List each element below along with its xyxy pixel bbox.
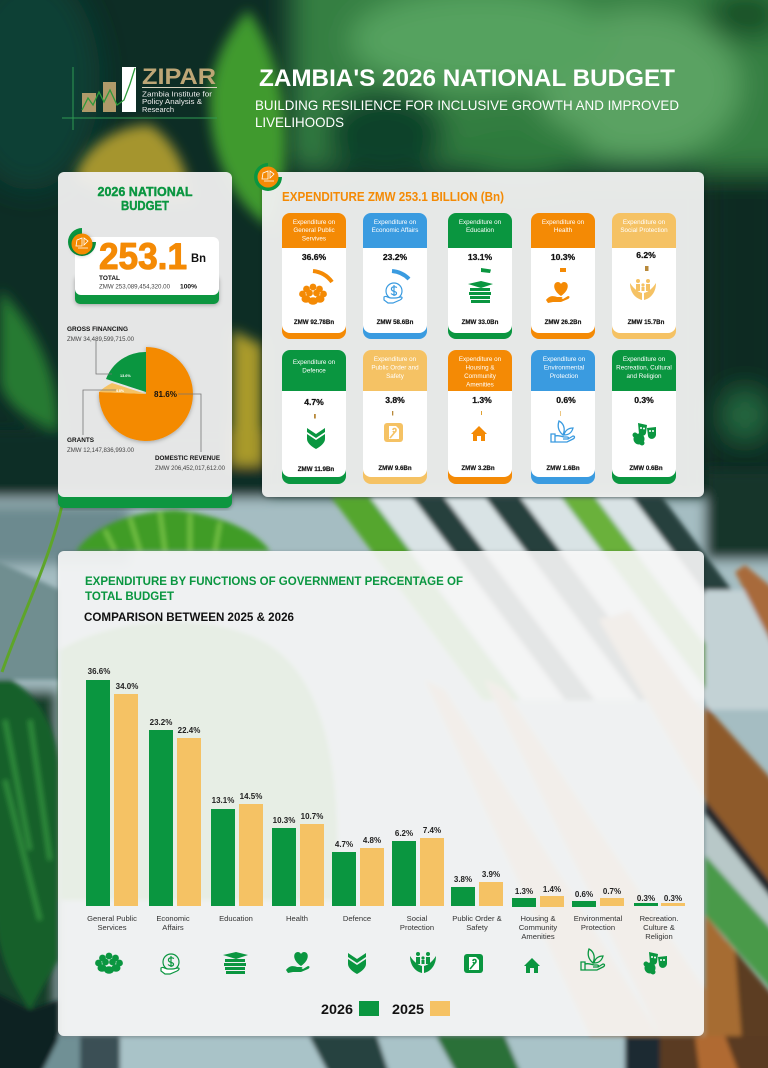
card: general public services: Expenditure on xyxy=(293,219,336,226)
card: social protection: Social Protection xyxy=(620,227,668,234)
total card xyxy=(75,236,219,304)
right edge xyxy=(705,590,768,710)
label: grants xyxy=(67,437,135,454)
pie chart: financing: 4.8% xyxy=(116,389,125,393)
legend: 2025 xyxy=(392,1002,425,1017)
bar chart: 2026 vs 2025 xyxy=(86,667,685,907)
green textured leaf xyxy=(76,510,270,551)
card: recreation, cultural and religion: 0.3% xyxy=(634,395,654,405)
category labels: Public Order & xyxy=(452,914,502,923)
bar chart: 2026 vs 2025: 1.3% xyxy=(515,887,533,896)
subheading: comparison: COMPARISON BETWEEN 2025 & 2026 xyxy=(84,612,294,624)
card: housing and community amenities: Amenities xyxy=(466,382,494,388)
card: education: 13.1% xyxy=(468,252,493,262)
total card: ZMW 253,089,454,320.00 xyxy=(99,284,171,290)
card: defence: ZMW 11.9Bn xyxy=(298,466,334,473)
subtitle: LIVELIHOODS xyxy=(255,114,344,130)
bar chart: 2026 vs 2025: 34.0% xyxy=(116,682,138,691)
card: general public services: Servives xyxy=(302,236,326,242)
total card: TOTAL xyxy=(99,275,120,282)
logo: ZIPAR: ZIPAR xyxy=(142,64,216,89)
card: social protection: ZMW 15.7Bn xyxy=(628,319,665,326)
bar chart: 2026 vs 2025: 10.7% xyxy=(301,812,323,821)
bar chart: 2026 vs 2025: 0.3% xyxy=(664,894,682,903)
bar chart: 2026 vs 2025: 36.6% xyxy=(88,667,110,676)
card: social protection: Expenditure on xyxy=(623,219,666,226)
card: environmental protection: Protection xyxy=(550,373,579,380)
subtitle: BUILDING RESILIENCE FOR INCLUSIVE GROWTH AND IMPROVED xyxy=(255,97,679,113)
card: general public services: 36.6% xyxy=(302,252,327,262)
category labels: Education xyxy=(219,914,253,923)
card: economic affairs: Economic Affairs xyxy=(372,227,418,234)
heading: expenditure: EXPENDITURE ZMW 253.1 BILLION (Bn) xyxy=(282,190,504,204)
bar chart: 2026 vs 2025: 0.3% xyxy=(637,894,655,903)
card: defence: 4.7% xyxy=(304,397,324,407)
card: environmental protection: 0.6% xyxy=(556,395,576,405)
total card: 100% xyxy=(180,284,197,290)
card: recreation, cultural and religion xyxy=(612,350,676,484)
card: housing and community amenities: ZMW 3.2Bn xyxy=(461,465,495,472)
bar chart: 2026 vs 2025: 1.4% xyxy=(543,885,561,894)
card: general public services: ZMW 92.78Bn xyxy=(294,319,334,326)
card: housing and community amenities: Community xyxy=(464,373,497,380)
label: gross financing xyxy=(67,326,135,343)
category labels: Community xyxy=(519,923,557,932)
pie chart: financing: 13.6% xyxy=(120,374,131,378)
card: public order and safety: Public Order and xyxy=(371,364,419,372)
card: recreation, cultural and religion: ZMW 0.6Bn xyxy=(629,465,663,472)
category labels: Protection xyxy=(581,923,615,932)
bar chart: 2026 vs 2025: 4.7% xyxy=(335,840,353,849)
legend: 2026 xyxy=(321,1002,354,1017)
label: domestic revenue: ZMW 206,452,017,612.00 xyxy=(155,465,226,472)
bar chart: 2026 vs 2025: 14.5% xyxy=(240,792,262,801)
logo: ZIPAR: Zambia Institute for xyxy=(142,92,213,98)
category labels: Religion xyxy=(645,932,673,941)
card: public order and safety: Expenditure on xyxy=(374,356,417,363)
category labels: Amenities xyxy=(521,932,555,941)
bar chart: 2026 vs 2025: 10.3% xyxy=(273,816,295,825)
card: environmental protection: Environmental xyxy=(544,364,584,372)
pie chart: financing xyxy=(83,340,201,452)
panel: 2026 national budget xyxy=(58,172,232,508)
label: grants: ZMW 12,147,836,993.00 xyxy=(67,447,135,454)
card: general public services: General Public xyxy=(293,227,335,234)
card: environmental protection xyxy=(531,350,595,484)
card: economic affairs xyxy=(363,213,427,339)
bar chart: 2026 vs 2025: 23.2% xyxy=(150,718,172,727)
label: domestic revenue: DOMESTIC REVENUE xyxy=(155,455,221,462)
card: education: ZMW 33.0Bn xyxy=(462,319,499,326)
card: education xyxy=(448,213,512,339)
label: domestic revenue xyxy=(155,455,226,472)
category labels: Recreation. xyxy=(640,914,678,923)
bar chart: 2026 vs 2025: 3.9% xyxy=(482,870,500,879)
heading: expenditure by functions: EXPENDITURE BY FUNCTIONS OF GOVERNMENT PERCENTAGE OF xyxy=(85,576,463,588)
card: public order and safety xyxy=(363,350,427,484)
bar chart: 2026 vs 2025: 0.6% xyxy=(575,890,593,899)
card: general public services xyxy=(282,213,346,339)
panel: expenditure cards xyxy=(254,163,704,497)
label: grants: GRANTS xyxy=(67,437,95,444)
category labels: Services xyxy=(97,923,127,932)
bar chart: 2026 vs 2025: 6.2% xyxy=(395,829,413,838)
card: economic affairs: 23.2% xyxy=(383,252,408,262)
total card: 253.1 xyxy=(99,236,187,277)
icon: expenditure badge xyxy=(254,163,282,191)
label: gross financing: ZMW 34,489,599,715.00 xyxy=(67,336,135,343)
bar chart: 2026 vs 2025: 4.8% xyxy=(363,836,381,845)
category labels: Environmental xyxy=(574,914,623,923)
card: social protection xyxy=(612,213,676,339)
card: environmental protection: Expenditure on xyxy=(543,356,586,363)
heading: expenditure by functions xyxy=(85,576,463,600)
heading: 2026 national budget xyxy=(98,186,192,210)
card: health: Health xyxy=(554,227,573,234)
bar chart: 2026 vs 2025: 13.1% xyxy=(212,796,234,805)
category labels: General Public xyxy=(87,914,137,923)
card: defence xyxy=(282,350,346,484)
bar chart: 2026 vs 2025: 22.4% xyxy=(178,726,200,735)
card: health: Expenditure on xyxy=(542,219,585,226)
card: health xyxy=(531,213,595,339)
card: housing and community amenities: Housing & xyxy=(465,364,495,372)
card: defence: Defence xyxy=(302,368,326,374)
card: recreation, cultural and religion: Expenditure on xyxy=(623,356,666,363)
subtitle xyxy=(256,100,678,127)
paper stripes xyxy=(367,497,708,701)
bar chart: 2026 vs 2025: 0.7% xyxy=(603,887,621,896)
card: recreation, cultural and religion: Recreation, Cultural xyxy=(616,364,672,372)
logo: ZIPAR: Research xyxy=(142,107,174,114)
category labels: Housing & xyxy=(520,914,556,923)
card: public order and safety: ZMW 9.6Bn xyxy=(378,465,412,472)
heading: 2026 national budget: 2026 NATIONAL xyxy=(98,184,193,199)
card: public order and safety: Safety xyxy=(386,373,405,380)
category labels xyxy=(87,914,678,941)
category labels: Protection xyxy=(400,923,434,932)
category labels: Culture & xyxy=(643,923,675,932)
category icons xyxy=(95,949,667,974)
card: environmental protection: ZMW 1.6Bn xyxy=(546,465,580,472)
category labels: Health xyxy=(286,914,308,923)
card: public order and safety: 3.8% xyxy=(385,395,405,405)
ghost leaf and pencils under panel xyxy=(0,560,60,680)
card: social protection: 6.2% xyxy=(636,250,656,260)
legend xyxy=(321,1001,450,1017)
label: gross financing: GROSS FINANCING xyxy=(67,326,128,333)
total card: Bn xyxy=(191,251,206,265)
title: ZAMBIA'S 2026 NATIONAL BUDGET xyxy=(259,65,675,92)
category labels: Affairs xyxy=(162,923,184,932)
card: housing and community amenities: Expenditure on xyxy=(459,356,502,363)
category labels: Economic xyxy=(156,914,190,923)
card: education: Expenditure on xyxy=(459,219,502,226)
category labels: Social xyxy=(407,914,428,923)
bar chart: 2026 vs 2025: 3.8% xyxy=(454,875,472,884)
lower-left leaf xyxy=(0,672,58,1010)
bar chart: 2026 vs 2025: 7.4% xyxy=(423,826,441,835)
card: housing and community amenities: 1.3% xyxy=(472,395,492,405)
category labels: Defence xyxy=(343,914,371,923)
card: housing and community amenities xyxy=(448,350,512,484)
icon: budget badge xyxy=(68,228,96,256)
pie chart: financing: 81.6% xyxy=(154,389,177,399)
category labels: Safety xyxy=(466,923,488,932)
heading: 2026 national budget: BUDGET xyxy=(121,198,169,213)
card: economic affairs: Expenditure on xyxy=(374,219,417,226)
heading: expenditure by functions: TOTAL BUDGET xyxy=(85,591,174,603)
card: health: 10.3% xyxy=(551,252,576,262)
card: economic affairs: ZMW 58.6Bn xyxy=(377,319,414,326)
bottom strip xyxy=(0,1036,640,1068)
logo: ZIPAR xyxy=(62,64,217,130)
card: defence: Expenditure on xyxy=(293,359,336,366)
card: recreation, cultural and religion: and Religion xyxy=(626,373,662,380)
panel: expenditure by functions comparison xyxy=(58,551,704,1036)
card: health: ZMW 26.2Bn xyxy=(545,319,582,326)
logo: ZIPAR: Policy Analysis & xyxy=(142,99,202,106)
card: education: Education xyxy=(466,227,494,234)
